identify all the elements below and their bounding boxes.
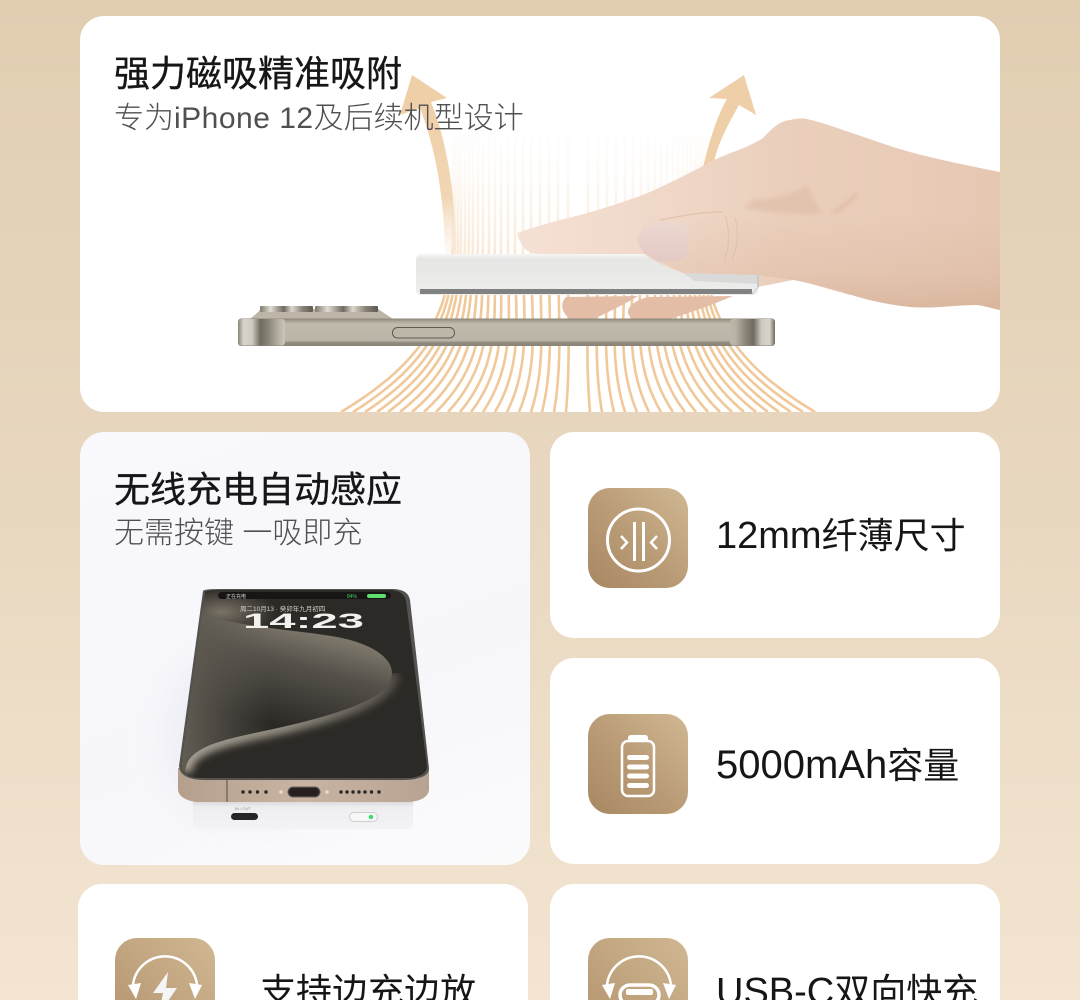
icon: thumb nail	[637, 222, 688, 262]
panel: strong magnetic attachment	[80, 16, 1000, 412]
phone side view	[238, 306, 775, 346]
panel: 5000mAh capacity	[550, 658, 1000, 864]
subheading: 无需按键 一吸即充	[114, 517, 362, 550]
hand: thumb and palm	[638, 194, 1000, 310]
panel: 12mm thin size	[550, 432, 1000, 638]
panel: pass-through charging	[78, 884, 528, 1000]
subheading: 专为iPhone 12及后续机型设计	[114, 102, 524, 135]
heading: 强力磁吸精准吸附	[114, 53, 402, 94]
power bank	[193, 798, 413, 829]
lock screen date: 周二10月13 · 癸卯年九月初四	[240, 604, 325, 613]
lock screen time: 14:23	[243, 610, 364, 633]
icon: thickness	[588, 488, 688, 588]
icon: USB-C port in circular arrows	[588, 938, 688, 1000]
phone wallpaper	[181, 590, 427, 778]
illustration: phone on power bank	[178, 589, 429, 827]
phone body: 84%	[347, 594, 358, 600]
illustration: phone, power bank, hand and magnetic field	[238, 75, 1000, 412]
heading: 无线充电自动感应	[114, 469, 402, 510]
panel: USB-C bidirectional fast charging	[550, 884, 1000, 1000]
label: 12mm纤薄尺寸	[716, 515, 966, 557]
icon: bolt in circular arrows	[115, 938, 215, 1000]
panel: wireless auto charging	[80, 432, 530, 865]
arrow: right upward	[702, 75, 756, 172]
phone body: 正在充电	[226, 593, 246, 600]
label: 5000mAh容量	[716, 743, 959, 787]
soft shadow	[164, 660, 300, 815]
power bank: IN / OUT	[235, 806, 251, 811]
hand: lower fingers	[562, 296, 733, 319]
magnetic field lines	[340, 165, 816, 412]
status bar	[218, 592, 391, 599]
hand: back and index finger	[517, 118, 1000, 310]
phone body	[167, 585, 435, 802]
power bank	[416, 254, 759, 295]
bottom edge details	[226, 780, 228, 802]
icon: battery	[588, 714, 688, 814]
arrow: left upward	[400, 75, 456, 262]
